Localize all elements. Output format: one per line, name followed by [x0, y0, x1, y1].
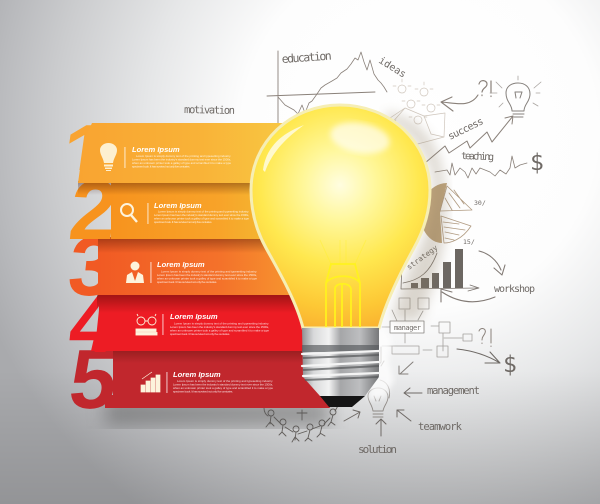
heading and text: [170, 312, 269, 336]
heading and text: specimen book. It has survived not only five centuries.: [170, 332, 230, 336]
heading and text: Lorem Ipsum has been the industry's standard dummy text ever since the 1500s,: [154, 213, 249, 217]
sketch: success growth arrow: success: [446, 116, 485, 143]
sketch: box of small bulbs: [390, 79, 445, 146]
ribbon 5: [105, 347, 330, 408]
heading and text: Lorem Ipsum is simply dummy text of the printing and typesetting industry.: [161, 270, 257, 274]
sketch: solution label and arrow: solution: [358, 443, 397, 456]
sketch: question mark and dollar lower: [457, 329, 517, 378]
sketch: education chart: [267, 49, 387, 125]
numeral 5: 5: [65, 332, 122, 426]
sketch: top right bulb: [490, 76, 541, 117]
heading and text: specimen book. It has survived not only five centuries.: [157, 280, 217, 284]
torn paper highlight: [368, 325, 394, 400]
sketch: return arrow: [441, 95, 478, 111]
icon: bar chart: [141, 372, 160, 392]
sketch: manager box: manager: [394, 324, 421, 332]
sketch: teaching heartbeat: teaching: [461, 151, 494, 163]
sketch: ideas label: ideas: [376, 55, 408, 80]
sketch: solution label and arrow: [358, 419, 397, 456]
numeral 2: 2: [65, 163, 122, 257]
sketch: pie chart: 30/: [474, 199, 486, 207]
ribbon 2: [111, 181, 291, 239]
glass highlight: top: [328, 118, 392, 158]
metal screw base: [302, 328, 379, 407]
heading and text: Lorem Ipsum: [157, 260, 205, 269]
sketch: question mark and dollar lower: $: [503, 352, 517, 378]
glass highlight: left crescent: [263, 125, 304, 172]
numeral 4: 4: [65, 276, 122, 370]
ribbon 4: [91, 295, 305, 351]
heading and text: specimen book. It has survived not only five centuries.: [132, 164, 190, 168]
heading and text: Lorem Ipsum has been the industry's standard dummy text ever since the 1500s,: [173, 382, 273, 386]
numeral 3: 3: [64, 219, 121, 313]
sketch: teamwork label and arrow: [397, 410, 463, 433]
heading and text: Lorem Ipsum has been the industry's standard dummy text ever since the 1500s,: [170, 325, 269, 329]
sketch: down arrows: [378, 347, 413, 374]
sketch: motivation label: motivation: [184, 104, 235, 117]
heading and text: Lorem Ipsum has been the industry's standard dummy text ever since the 1500s,: [132, 158, 231, 162]
sketch: management label and arrow: [404, 385, 480, 397]
heading and text: Lorem Ipsum: [170, 312, 218, 321]
panel: step 3: [64, 219, 303, 313]
sketch: arrow to small bulb: [344, 410, 360, 421]
background bottom shading: [0, 370, 600, 504]
ribbon 3: [98, 237, 303, 295]
numeral 1: 1: [55, 107, 115, 201]
heading and text: [154, 201, 249, 224]
icon: magnifier: [121, 204, 137, 222]
heading and text: when an unknown printer took a galley of type and scrambled it to make a type: [157, 276, 257, 280]
metal contact: [320, 396, 365, 407]
light bulb: [251, 105, 430, 407]
panel: step 4: [65, 276, 305, 370]
heading and text: when an unknown printer took a galley of type and scrambled it to make a type: [154, 216, 249, 220]
heading and text: Lorem Ipsum is simply dummy text of the printing and typesetting industry.: [136, 154, 231, 158]
sketch: pie chart: 15/: [463, 238, 475, 246]
heading and text: specimen book. It has survived not only five centuries.: [173, 390, 233, 394]
heading and text: Lorem Ipsum has been the industry's standard dummy text ever since the 1500s,: [157, 273, 257, 277]
icon: glasses on books: [136, 314, 157, 335]
sketch: teaching heartbeat: [435, 151, 527, 178]
sketch: management label and arrow: management: [427, 385, 480, 397]
heading and text: [157, 260, 257, 284]
heading and text: Lorem Ipsum: [154, 201, 202, 210]
sketch: organisation chart: [375, 297, 472, 357]
sketch: strategy bar chart: strategy: [405, 243, 440, 272]
icon: light bulb: [100, 143, 117, 171]
bulb shadow: [385, 112, 446, 320]
bulb glass: [251, 105, 430, 328]
sketch: pie chart: [420, 183, 486, 246]
panel: step 1: [69, 123, 282, 183]
heading and text: specimen book. It has survived not only five centuries.: [154, 220, 212, 224]
heading and text: when an unknown printer took a galley of type and scrambled it to make a type: [173, 386, 273, 390]
sketch: dollar sign top: $: [530, 150, 544, 176]
heading and text: when an unknown printer took a galley of type and scrambled it to make a type: [132, 161, 231, 165]
ribbon 1: [78, 123, 285, 183]
heading and text: Lorem Ipsum is simply dummy text of the printing and typesetting industry.: [158, 210, 249, 214]
panel: step 2: [65, 163, 291, 257]
sketch: teamwork label and arrow: teamwork: [418, 421, 463, 433]
sketch: people chain: [264, 404, 339, 442]
sketch: success growth arrow: [425, 116, 513, 163]
ribbon drop shadow: [105, 400, 330, 426]
sketch: education chart: education: [281, 49, 332, 66]
filament: [320, 240, 366, 327]
sketch: strategy bar chart: [401, 243, 479, 291]
heading and text: Lorem Ipsum is simply dummy text of the printing and typesetting industry.: [177, 379, 273, 383]
heading and text: when an unknown printer took a galley of type and scrambled it to make a type: [170, 328, 269, 332]
heading and text: Lorem Ipsum: [132, 145, 180, 154]
heading and text: [173, 370, 273, 394]
panel: step 5: [65, 332, 330, 426]
heading and text: Lorem Ipsum is simply dummy text of the printing and typesetting industry.: [174, 322, 269, 326]
heading and text: [132, 145, 231, 168]
heading and text: Lorem Ipsum: [173, 370, 221, 379]
sketch: question and exclamation: [479, 81, 491, 96]
sketch: workshop label and arrows: workshop: [494, 284, 535, 295]
sketches: hand-drawn doodles: [184, 49, 544, 456]
sketch: workshop label and arrows: [441, 251, 535, 302]
icon: businessman: [126, 262, 144, 283]
sketch: small bulb: [368, 380, 390, 417]
